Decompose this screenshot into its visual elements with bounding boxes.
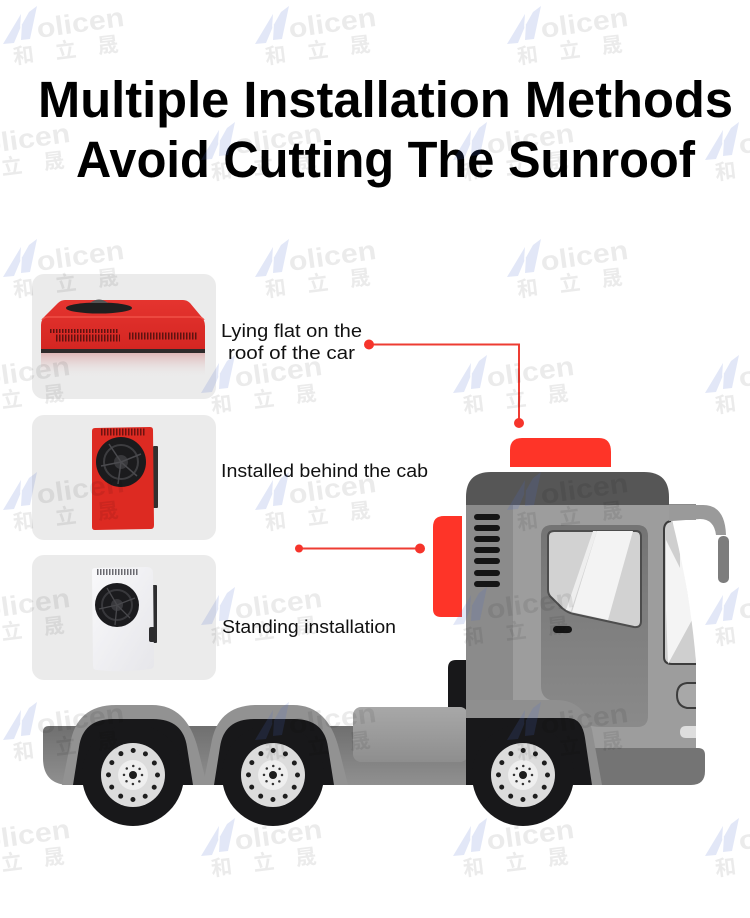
watermarks: 和立晟	[264, 498, 372, 535]
arrow: cab callout	[295, 544, 425, 554]
watermarks: olicen	[35, 698, 126, 740]
watermarks: olicen	[233, 351, 324, 393]
icon: red flat air conditioner	[41, 300, 205, 378]
truck door handle	[553, 626, 572, 633]
truck fenders	[62, 705, 207, 785]
truck mirror arm	[669, 505, 726, 535]
watermarks: 和立晟	[210, 844, 318, 881]
panel: rear mount unit	[32, 415, 216, 540]
icon: red vertical air conditioner	[92, 427, 158, 530]
truck wheels	[82, 724, 574, 826]
watermarks: 和立晟	[264, 265, 372, 302]
watermarks: olicen	[35, 2, 126, 44]
truck headlamp	[680, 726, 696, 738]
watermarks: 和立晟	[516, 265, 624, 302]
watermarks: olicen	[287, 2, 378, 44]
watermarks: 和立晟	[12, 498, 120, 535]
watermarks: olicen	[539, 235, 630, 277]
watermarks: 和立晟	[516, 32, 624, 69]
watermarks: 和立晟	[264, 32, 372, 69]
panel: standing unit	[32, 555, 216, 680]
watermarks: olicen	[35, 235, 126, 277]
title	[38, 71, 733, 188]
watermarks: olicen	[233, 814, 324, 856]
title: Multiple Installation Methods	[38, 71, 733, 128]
watermarks: olicen	[539, 2, 630, 44]
truck wheel arches	[73, 719, 193, 785]
watermarks: olicen	[539, 468, 630, 510]
watermarks: olicen	[35, 468, 126, 510]
watermarks: 和立晟	[516, 728, 624, 765]
watermarks: olicen	[485, 351, 576, 393]
watermarks: 和立晟	[462, 148, 570, 185]
title: Avoid Cutting The Sunroof	[76, 131, 696, 188]
watermarks: olicen	[287, 235, 378, 277]
truck rear chassis	[43, 726, 469, 785]
watermarks: 和立晟	[462, 613, 570, 650]
truck cab body	[466, 472, 729, 748]
watermarks: olicen	[485, 814, 576, 856]
truck windshield	[664, 521, 696, 664]
truck door window	[548, 531, 641, 627]
truck door	[541, 525, 648, 727]
text: lying flat label: roof of the car	[228, 342, 355, 363]
red unit on the roof	[510, 438, 611, 467]
watermarks: olicen	[485, 583, 576, 625]
watermarks: 和立晟	[12, 32, 120, 69]
watermarks: olicen	[287, 698, 378, 740]
watermarks: 和立晟	[516, 498, 624, 535]
watermarks: olicen	[233, 583, 324, 625]
watermarks: 和立晟	[462, 844, 570, 881]
watermarks: 和立晟	[12, 265, 120, 302]
truck cab vents	[474, 514, 500, 587]
panel: flat roof unit	[32, 274, 216, 399]
truck lamp	[677, 683, 696, 708]
truck front bumper	[560, 748, 705, 785]
watermarks: olicen	[539, 698, 630, 740]
truck mirror	[718, 536, 729, 583]
watermarks: 和立晟	[210, 613, 318, 650]
truck equipment box	[353, 707, 468, 762]
text: lying flat label: Lying flat on the	[221, 320, 362, 341]
text: behind cab label: Installed behind the cab	[221, 460, 428, 481]
watermarks: 和立晟	[12, 728, 120, 765]
icon: white vertical air conditioner	[92, 567, 157, 671]
watermarks: olicen	[233, 118, 324, 160]
watermarks: 和立晟	[462, 381, 570, 418]
watermarks: 和立晟	[210, 381, 318, 418]
truck illustration	[43, 438, 729, 826]
watermarks: 和立晟	[210, 148, 318, 185]
watermarks: olicen	[485, 118, 576, 160]
text: lying flat label	[221, 320, 362, 363]
text: standing label: Standing installation	[222, 616, 396, 637]
truck black rear cab support	[448, 660, 468, 710]
arrow: roof callout	[364, 340, 524, 428]
watermarks: 和立晟	[264, 728, 372, 765]
watermarks: olicen	[287, 468, 378, 510]
red unit behind the cab	[433, 516, 462, 617]
